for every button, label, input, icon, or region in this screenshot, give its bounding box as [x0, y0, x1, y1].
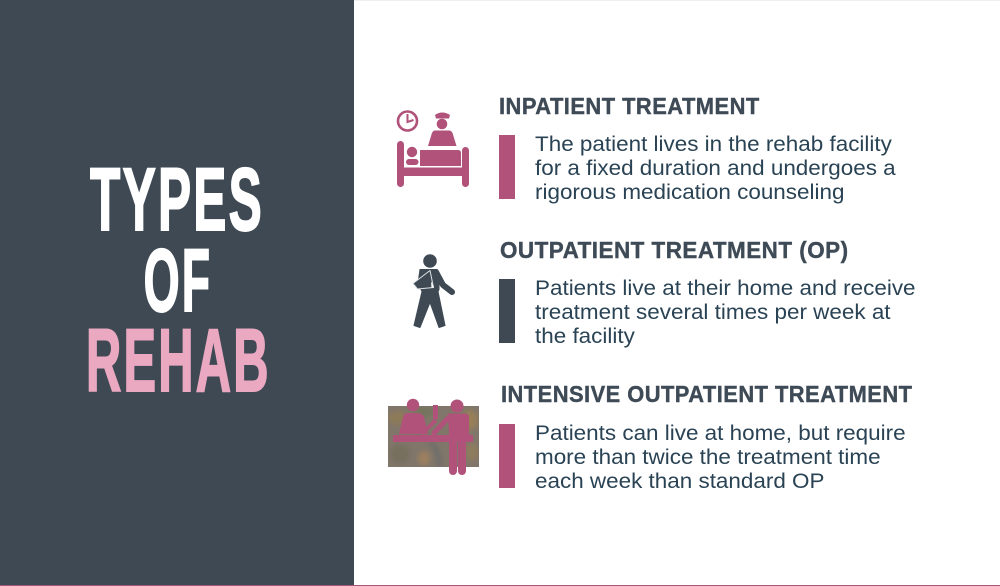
text: inpatient description [535, 132, 896, 204]
text: intensive outpatient description [535, 420, 906, 493]
text: intensive outpatient description: Patients can live at home, but require [535, 420, 906, 444]
text: outpatient description: the facility [535, 324, 635, 348]
text: inpatient description: The patient lives in the rehab facility [535, 132, 892, 156]
text: outpatient description [535, 276, 916, 348]
text: outpatient description: Patients live at their home and receive [535, 276, 916, 300]
icon: walking person with arm sling [412, 254, 455, 328]
accent bar: intensive outpatient [499, 424, 515, 488]
title: TYPES OF REHAB [86, 149, 270, 410]
heading: outpatient treatment: OUTPATIENT TREATMENT (OP) [500, 237, 849, 263]
text: intensive outpatient description: more than twice the treatment time [535, 445, 881, 469]
accent bar: outpatient [499, 279, 515, 343]
text: outpatient description: treatment several times per week at [535, 300, 891, 324]
text: inpatient description: for a fixed duration and undergoes a [535, 156, 896, 180]
icon: nurse and patient in bed [396, 110, 469, 187]
icon: photo with two figures at a desk [388, 398, 479, 475]
title: TYPES OF REHAB: OF [144, 230, 212, 330]
text: intensive outpatient description: each week than standard OP [535, 469, 824, 493]
heading: inpatient treatment: INPATIENT TREATMENT [499, 93, 760, 119]
heading: intensive outpatient treatment: INTENSIVE OUTPATIENT TREATMENT [501, 381, 912, 407]
photo: autumn forest [388, 406, 479, 467]
title: TYPES OF REHAB: TYPES [90, 149, 264, 249]
accent bar: inpatient [499, 135, 515, 199]
panel: left title panel [0, 0, 354, 586]
text: inpatient description: rigorous medication counseling [535, 180, 844, 204]
title: TYPES OF REHAB: REHAB [86, 310, 270, 410]
